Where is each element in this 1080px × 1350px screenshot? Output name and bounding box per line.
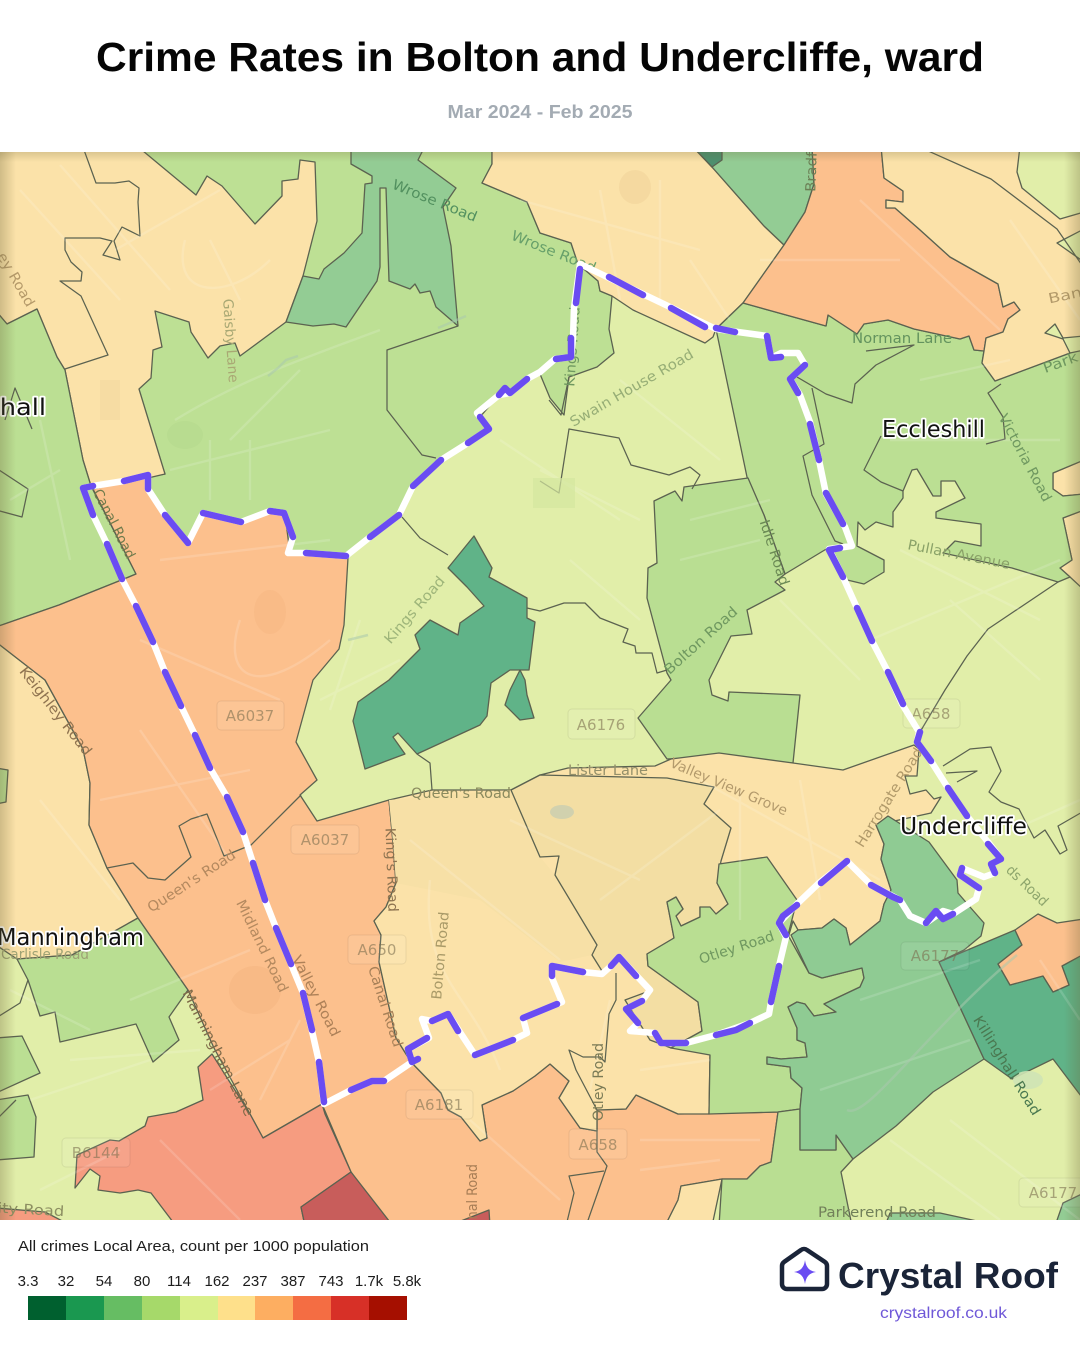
place: Undercliffe: Undercliffe bbox=[900, 814, 1027, 840]
area: Manningham green bbox=[17, 918, 188, 1062]
faint street network bbox=[10, 165, 1080, 1220]
area: south-west darker tan bbox=[389, 790, 510, 882]
shield A6037 second: A6037 bbox=[301, 831, 349, 849]
shield A6177: A6177 bbox=[911, 947, 959, 965]
road labels: Bolton Road bbox=[661, 604, 741, 678]
legend values: 54 bbox=[96, 1273, 112, 1290]
road labels: Bolton Road bbox=[429, 911, 453, 1000]
road labels: Harrogate Road bbox=[853, 745, 927, 850]
area: south tan bbox=[374, 745, 941, 1141]
road labels: Idle Road bbox=[756, 518, 792, 588]
title: Crime Rates in Bolton and Undercliffe, ward bbox=[96, 34, 984, 80]
wordmark: Crystal Roof bbox=[838, 1255, 1059, 1296]
shield A6037: A6037 bbox=[226, 707, 274, 725]
area: south green below Otley bbox=[719, 1109, 853, 1226]
shield A658: A658 bbox=[912, 705, 950, 723]
area: Otley Road green bbox=[647, 857, 864, 1114]
legend values: 162 bbox=[204, 1273, 230, 1290]
road labels: Manningham Lane bbox=[179, 987, 256, 1119]
road labels: Pullan Avenue bbox=[906, 537, 1011, 573]
area: dark red bbox=[300, 1172, 389, 1220]
legend values: 80 bbox=[134, 1273, 150, 1290]
area: central dark green patch bbox=[353, 536, 535, 769]
area: west edge small green bbox=[0, 768, 8, 804]
area: central dark green leaf bbox=[505, 670, 534, 720]
legend title: All crimes Local Area, count per 1000 population bbox=[18, 1238, 369, 1255]
area: south darker tan bbox=[511, 775, 731, 1048]
road labels: Gaisby Lane bbox=[219, 298, 241, 383]
shield A6176 bbox=[568, 709, 635, 739]
shield A658 south bbox=[569, 1129, 627, 1159]
area: west green bbox=[0, 309, 136, 627]
road shields bbox=[62, 699, 1080, 1207]
place labels bbox=[0, 395, 1027, 951]
legend values: 1.7k bbox=[355, 1273, 384, 1290]
road labels: Ban bbox=[1047, 285, 1080, 307]
place: Eccleshill: Eccleshill bbox=[882, 417, 985, 443]
internal boundaries bbox=[0, 150, 1080, 1226]
legend bbox=[18, 1238, 422, 1320]
road labels: Canal Road bbox=[364, 964, 405, 1049]
legend values: 114 bbox=[167, 1273, 191, 1290]
area: north-west tan bbox=[0, 146, 317, 486]
road labels: Victoria Road bbox=[995, 412, 1054, 505]
shield A658 south: A658 bbox=[579, 1136, 617, 1154]
area: darkest top patch bbox=[698, 152, 723, 168]
area: south-east orange bbox=[998, 914, 1080, 992]
shield A6181 bbox=[406, 1090, 473, 1119]
ward boundary: purple dashes bbox=[83, 269, 1001, 1102]
area: north darker green bbox=[286, 146, 458, 327]
crime rate areas bbox=[0, 146, 1080, 1226]
shield A6177 east: A6177 bbox=[1029, 1184, 1077, 1202]
legend values: 32 bbox=[58, 1273, 74, 1290]
road labels: Bradf bbox=[803, 150, 821, 192]
road labels: Midland Road bbox=[232, 897, 291, 995]
legend values bbox=[18, 1273, 422, 1290]
legend values: 237 bbox=[242, 1273, 268, 1290]
shield A6177 bbox=[901, 942, 969, 970]
area: darker green east bbox=[767, 816, 984, 1159]
road labels: Kings Road bbox=[381, 573, 449, 647]
road labels: Otley Road bbox=[591, 1043, 607, 1121]
shield A650 bbox=[348, 935, 406, 964]
road labels: Valley Road bbox=[288, 953, 343, 1039]
logo: Crystal Roof bbox=[782, 1249, 1059, 1322]
road labels: Keighley Road bbox=[16, 664, 95, 759]
road labels: Queen's Road bbox=[145, 847, 239, 916]
road labels: Wrose Road bbox=[509, 228, 598, 277]
area: north-east tan bbox=[881, 146, 1080, 381]
icon: house with star bbox=[782, 1249, 827, 1289]
area: centre green, Bolton Road bbox=[638, 478, 800, 763]
road labels: Lister Lane bbox=[568, 763, 648, 779]
legend values: 5.8k bbox=[393, 1273, 422, 1290]
legend colour scale bbox=[28, 1296, 407, 1320]
road labels: Canal Road bbox=[89, 487, 138, 562]
shield A6181: A6181 bbox=[415, 1096, 463, 1114]
road labels: Queen's Road bbox=[411, 786, 511, 802]
legend values: 387 bbox=[280, 1273, 306, 1290]
area: tan at south bbox=[667, 1178, 722, 1220]
place: Manningham: Manningham bbox=[0, 925, 144, 951]
area: north green bbox=[100, 146, 614, 556]
ward boundary: white base bbox=[83, 264, 1001, 1104]
map edge shading bbox=[0, 152, 1080, 1220]
road labels: Canal Road bbox=[465, 1164, 481, 1236]
area: south-west small green lower bbox=[0, 1095, 36, 1160]
shield B6144 bbox=[62, 1138, 130, 1167]
shield A6037 bbox=[217, 701, 284, 730]
area: darkest green south-east bbox=[939, 930, 1080, 1100]
shield A6177 east bbox=[1019, 1178, 1080, 1207]
water and park tints bbox=[268, 316, 1017, 1111]
area: red strip bottom-left bbox=[0, 1208, 62, 1220]
legend values: 743 bbox=[318, 1273, 344, 1290]
road labels: ds Road bbox=[1003, 862, 1051, 910]
road labels: Kings Road bbox=[562, 306, 584, 387]
area: red bbox=[75, 1054, 351, 1226]
subtitle: date range: Mar 2024 - Feb 2025 bbox=[448, 102, 632, 122]
area: south-east small green bbox=[1056, 1194, 1080, 1220]
road labels: Parkerend Road bbox=[818, 1205, 936, 1221]
shield A6176: A6176 bbox=[577, 716, 625, 734]
area: north darker green right bbox=[697, 152, 814, 245]
road labels: Valley View Grove bbox=[667, 755, 790, 819]
road labels: Otley Road bbox=[697, 929, 776, 968]
area: east edge tan patch lower bbox=[1060, 510, 1080, 590]
area: south-west small green bbox=[0, 1036, 40, 1093]
road labels: Wrose Road bbox=[390, 177, 479, 226]
area: dark red south bbox=[462, 1209, 490, 1220]
shield A658 bbox=[903, 699, 960, 728]
road labels: Carlisle Road bbox=[1, 947, 89, 963]
area: north centre tan bbox=[482, 146, 784, 343]
area: west tan bbox=[0, 642, 138, 959]
area: east edge tan patches bbox=[1054, 462, 1080, 496]
area: main orange bbox=[0, 477, 778, 1226]
website: crystalroof.co.uk bbox=[880, 1305, 1008, 1322]
road labels: Killinghall Road bbox=[969, 1013, 1043, 1118]
road labels: Norman Lane bbox=[852, 331, 952, 347]
area: Eccleshill green bbox=[716, 303, 1080, 584]
legend values: 3.3 bbox=[18, 1273, 38, 1290]
area: south small green bbox=[886, 1212, 975, 1220]
shield A6037 second bbox=[291, 825, 359, 854]
road labels: Swain House Road bbox=[567, 347, 697, 430]
shield B6144: B6144 bbox=[72, 1144, 120, 1162]
road labels: Park bbox=[1041, 349, 1080, 377]
area: north-east orange bbox=[743, 146, 1020, 351]
road labels: King's Road bbox=[382, 828, 400, 912]
shield A650: A650 bbox=[358, 941, 396, 959]
